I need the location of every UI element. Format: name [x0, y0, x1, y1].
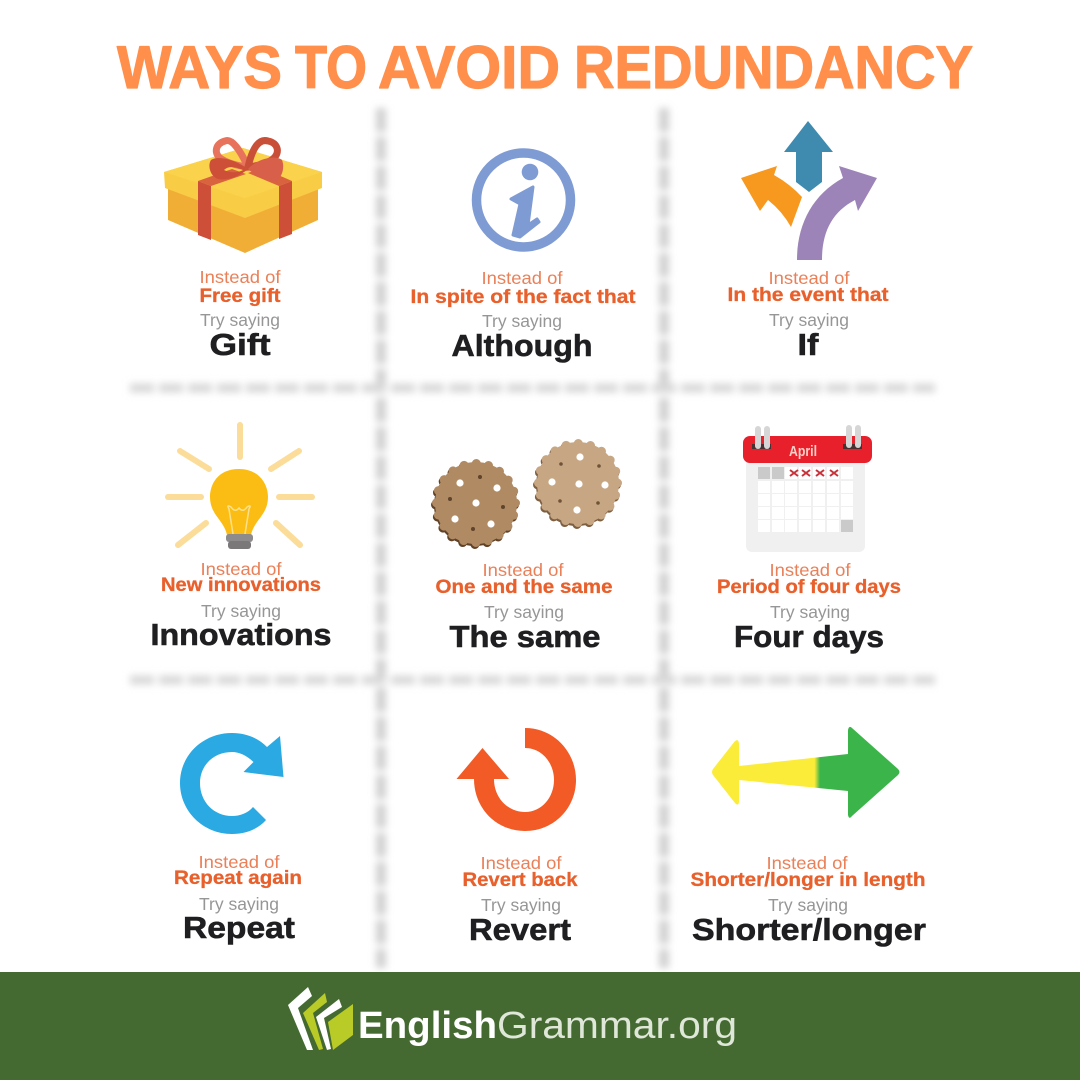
title: REDUNDANCY — [574, 34, 973, 101]
text: instead of: Instead of — [766, 853, 848, 873]
text: in spite of the fact that: In spite of the fact that — [410, 286, 636, 308]
title: AVOID — [378, 34, 560, 101]
title — [117, 34, 973, 101]
footer band — [0, 972, 1080, 1080]
text: repeat again: Repeat again — [174, 867, 302, 889]
icon: calendar: April — [789, 443, 817, 460]
panel: shorter/longer — [690, 727, 926, 947]
text: try saying: Try saying — [484, 602, 564, 622]
text: revert: Revert — [469, 912, 571, 947]
logo wordmark — [358, 1005, 737, 1047]
logo wordmark: English — [358, 1005, 497, 1047]
panel: four days — [717, 425, 901, 654]
text: try saying: Try saying — [481, 895, 561, 915]
text: try saying: Try saying — [770, 602, 850, 622]
text: in the event that: In the event that — [728, 284, 889, 306]
text: instead of: Instead of — [770, 560, 851, 580]
icon: orange counter-clockwise arrow — [456, 728, 576, 831]
text: try saying: Try saying — [201, 601, 281, 621]
icon: two cookies — [434, 442, 619, 546]
icon: double-headed arrow — [712, 727, 900, 818]
text: instead of: Instead of — [200, 559, 282, 579]
text: one and the same: One and the same — [436, 576, 613, 598]
text: try saying: Try saying — [199, 894, 279, 914]
icon: blue clockwise arrow — [180, 733, 284, 834]
panel: free gift — [164, 141, 322, 362]
text: shorter/longer: Shorter/longer — [692, 912, 926, 947]
text: the same: The same — [450, 619, 600, 654]
icon: light bulb — [168, 425, 312, 549]
text: try saying: Try saying — [482, 311, 562, 331]
text: instead of: Instead of — [768, 268, 850, 288]
text: instead of: Instead of — [482, 560, 564, 580]
text: new innovations: New innovations — [161, 574, 321, 596]
text: instead of: Instead of — [480, 853, 562, 873]
text: four days: Four days — [734, 619, 884, 654]
logo wordmark: Grammar.org — [497, 1005, 737, 1047]
text: period of four days: Period of four days — [717, 576, 901, 598]
text: shorter/longer in length: Shorter/longer in length — [690, 869, 926, 891]
text: although: Although — [452, 328, 592, 363]
text: gift: Gift — [210, 327, 270, 362]
text: instead of: Instead of — [482, 268, 563, 288]
text: repeat: Repeat — [183, 910, 295, 945]
panel: if — [728, 121, 889, 362]
text: revert back: Revert back — [462, 869, 578, 891]
title: TO — [295, 34, 367, 101]
panel: revert — [456, 728, 578, 947]
text: instead of: Instead of — [198, 852, 280, 872]
text: innovations: Innovations — [150, 617, 332, 652]
icon: gift box — [164, 141, 322, 253]
panel: repeat — [174, 733, 302, 945]
text: try saying: Try saying — [769, 310, 849, 330]
panel: innovations — [150, 425, 332, 652]
panel: the same — [434, 442, 619, 654]
text: instead of: Instead of — [200, 267, 281, 287]
icon: information circle — [476, 153, 570, 247]
icon: three direction arrows — [741, 121, 877, 260]
icon: calendar — [743, 425, 872, 552]
title: WAYS — [117, 34, 282, 101]
text: try saying: Try saying — [200, 310, 280, 330]
text: try saying: Try saying — [768, 895, 848, 915]
text: if: If — [798, 327, 819, 362]
icon: books logo — [288, 987, 353, 1050]
panel: although — [410, 153, 636, 363]
text: free gift: Free gift — [200, 285, 281, 307]
